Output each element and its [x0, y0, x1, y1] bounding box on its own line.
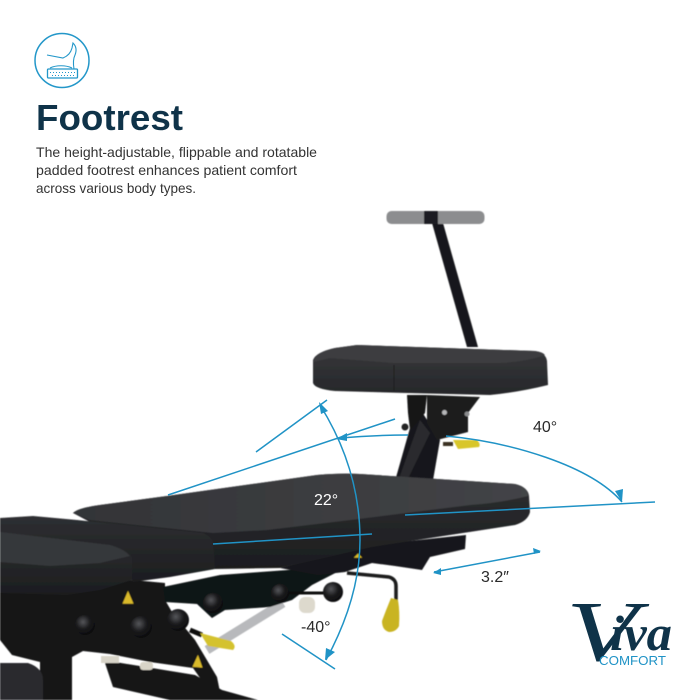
lower left pad [0, 663, 43, 700]
cream spacer blocks [101, 656, 153, 670]
3.2 inch dimension line [434, 552, 540, 572]
icon: foot on padded rest [35, 34, 89, 88]
description text: across various body types. [36, 180, 196, 196]
logo: Viva Comfort: V [566, 583, 650, 679]
angle lines and arrows [168, 400, 655, 669]
footrest pad [313, 345, 548, 395]
yellow lever [190, 630, 235, 650]
description text [36, 144, 317, 196]
text: 22° [314, 492, 338, 509]
knob rod [280, 592, 333, 594]
warning labels [122, 553, 363, 668]
arrowheads [319, 402, 623, 660]
lower tube and strut [105, 661, 258, 700]
main leg pad [73, 474, 530, 569]
silver rod [207, 603, 283, 650]
40 degree arc [340, 435, 408, 438]
middle pad [0, 516, 215, 582]
side frame plate [0, 580, 220, 700]
spacer roller [299, 597, 315, 613]
title: Footrest [36, 97, 183, 138]
angle labels: 40° [533, 419, 557, 436]
description text: padded footrest enhances patient comfort [36, 162, 297, 178]
rear under-frame strip [280, 535, 466, 575]
front pad [0, 532, 132, 595]
text: -40° [301, 619, 331, 636]
text: 3.2″ [481, 569, 509, 586]
angle 22 and -40 sweep arc [320, 405, 360, 660]
reference lines [256, 400, 327, 452]
logo: Viva Comfort: iva [610, 605, 672, 661]
T-handle [386, 211, 484, 347]
logo: Viva Comfort: COMFORT [599, 653, 666, 668]
logo: Viva Comfort [566, 583, 672, 679]
support post and bracket [393, 395, 480, 488]
crank handle [347, 573, 399, 632]
description text: The height-adjustable, flippable and rotatable [36, 144, 317, 160]
upper mechanism [163, 568, 345, 618]
adjustment table photo illustration [0, 211, 548, 700]
black knobs [75, 582, 343, 638]
